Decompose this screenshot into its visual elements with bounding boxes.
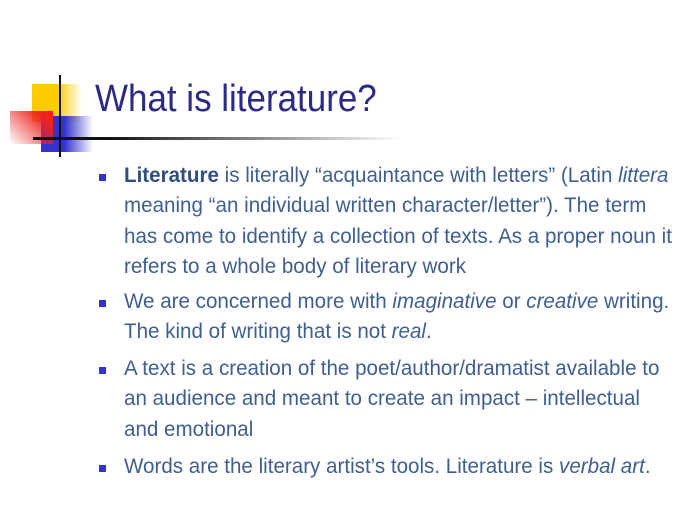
- bullet list: [99, 164, 672, 478]
- bullet 3: and emotional: [124, 418, 253, 441]
- bullet 1: meaning “an individual written character/letter”). The term: [124, 194, 646, 217]
- bullet 1: refers to a whole body of literary work: [124, 255, 466, 278]
- bullet 3: an audience and meant to create an impact – intellectual: [124, 387, 640, 410]
- bullet 2: [99, 290, 669, 343]
- bullet 4: Words are the literary artist’s tools. Literature is verbal art.: [124, 455, 651, 478]
- bullet 1: Literature is literally “acquaintance with letters” (Latin littera: [124, 164, 668, 187]
- title: What is literature?: [95, 78, 377, 120]
- logo: [10, 75, 392, 157]
- bullet 3: [99, 357, 659, 441]
- bullet 1: [99, 164, 672, 278]
- bullet 2: The kind of writing that is not real.: [124, 320, 432, 343]
- bullet 2: We are concerned more with imaginative or creative writing.: [124, 290, 669, 313]
- bullet 1: has come to identify a collection of texts. As a proper noun it: [124, 225, 672, 248]
- bullet 3: A text is a creation of the poet/author/dramatist available to: [124, 357, 659, 380]
